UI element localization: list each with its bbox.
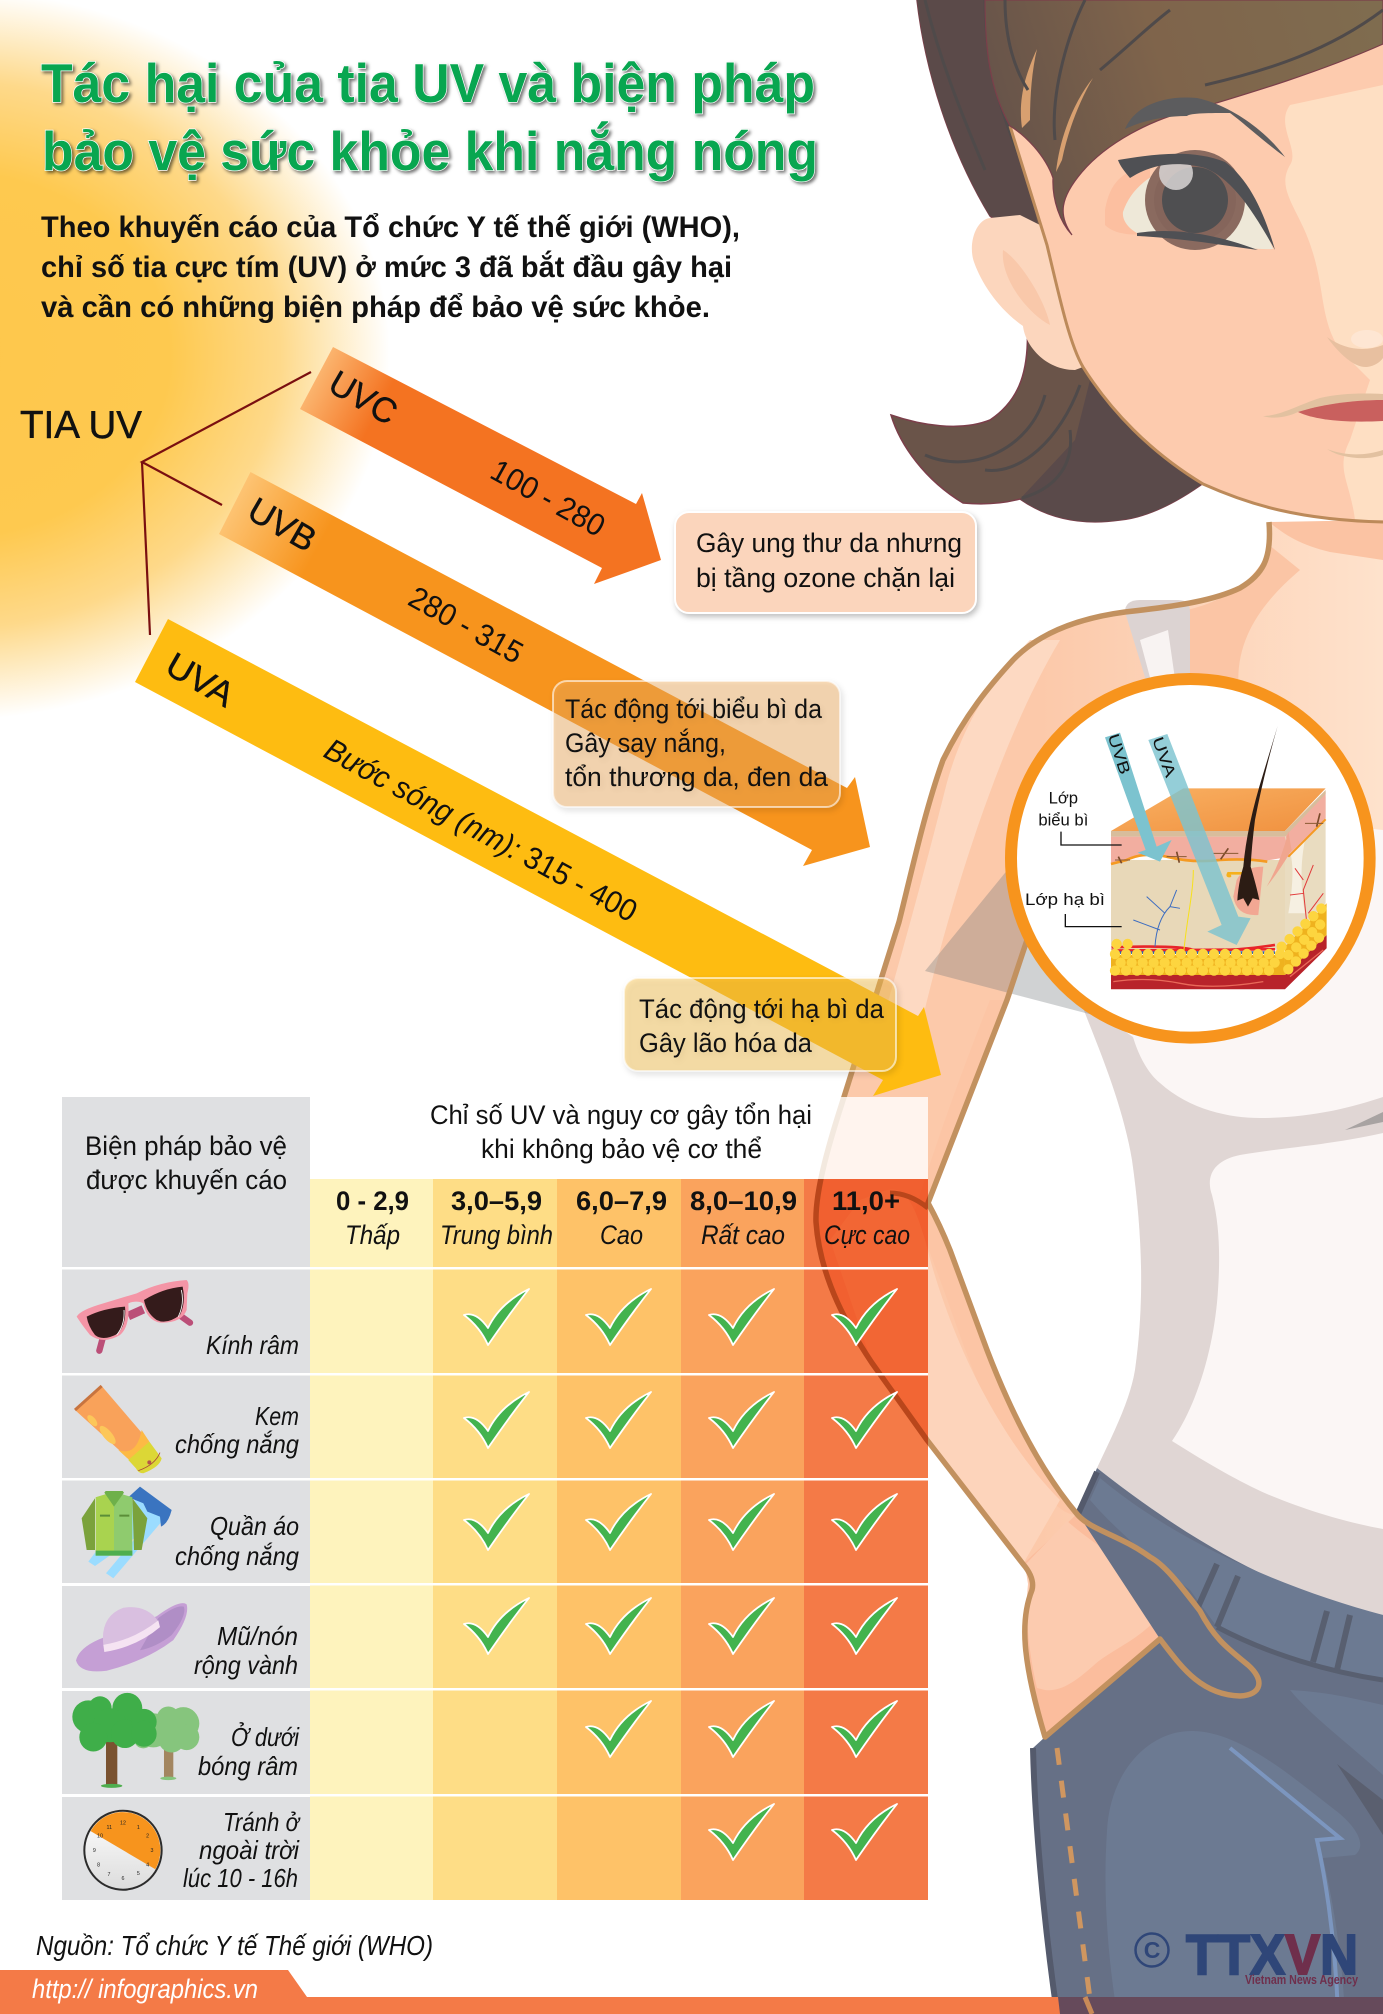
shirt xyxy=(1040,800,1383,1615)
illustration: woman xyxy=(816,0,1383,2014)
icon: clock: 8 xyxy=(97,1863,100,1869)
arrow: UVA xyxy=(135,619,941,1096)
icon: clock: 12 xyxy=(120,1821,126,1827)
icon: clock: 3 xyxy=(151,1848,153,1854)
heading: UV index xyxy=(430,1100,812,1164)
row labels: ngoài trời xyxy=(199,1835,300,1865)
heading: measures: Biện pháp bảo vệ xyxy=(85,1131,287,1161)
arrow: UVB inset: UVB xyxy=(1104,732,1133,777)
arm shading xyxy=(880,640,1060,1030)
row labels: lúc 10 - 16h xyxy=(183,1863,298,1893)
label: TIA UV: TIA UV xyxy=(20,404,142,447)
risk labels: Trung bình xyxy=(440,1220,553,1250)
shirt shadow band xyxy=(1080,1000,1383,1615)
UV index values xyxy=(336,1186,900,1216)
heading: measures xyxy=(85,1131,287,1195)
icon: clock: 9 xyxy=(93,1848,96,1854)
face xyxy=(1010,30,1383,522)
UV index values: 3,0–5,9 xyxy=(451,1186,542,1216)
skin block xyxy=(1104,726,1327,989)
footer bar xyxy=(0,1970,1383,2014)
icon: clock: 5 xyxy=(137,1871,140,1877)
ear xyxy=(972,215,1083,370)
icon: clock: 10 xyxy=(97,1834,103,1840)
callout: UVC xyxy=(675,512,976,613)
arrow: UVA inset: UVA xyxy=(1148,735,1179,780)
row labels: Kem xyxy=(255,1401,299,1431)
row separators xyxy=(62,1267,928,1796)
arrow: UVB xyxy=(219,472,870,866)
arrow: UVA: UVA xyxy=(159,645,242,715)
callout: UVB: Tác động tới biểu bì da xyxy=(565,694,823,724)
arrow: UVC: UVC xyxy=(322,363,404,433)
hair and follicle xyxy=(1233,867,1263,915)
row labels: rộng vành xyxy=(194,1650,298,1680)
icon: clock: 7 xyxy=(108,1872,110,1878)
background: sun glow xyxy=(0,0,420,760)
label: dermis: Lớp hạ bì xyxy=(1025,890,1105,909)
label: epidermis xyxy=(1038,788,1122,845)
logo: TTXVN: TTXVN xyxy=(1186,1923,1358,1987)
callout: UVB: tổn thương da, đen da xyxy=(565,762,829,792)
callout: UVA: Gây lão hóa da xyxy=(639,1028,813,1058)
risk columns xyxy=(310,1179,928,1900)
shadow wedge over arm xyxy=(925,830,1093,1015)
label: epidermis: biểu bì xyxy=(1038,811,1088,830)
callout: UVC: Gây ung thư da nhưng xyxy=(696,528,962,558)
label: dermis xyxy=(1025,890,1122,927)
UV index values: 0 - 2,9 xyxy=(336,1186,409,1216)
hand shading xyxy=(1023,1514,1259,1737)
intro text: chỉ số tia cực tím (UV) ở mức 3 đã bắt đầu gây hại xyxy=(41,250,732,284)
front hair xyxy=(985,0,1383,235)
intro text xyxy=(41,211,740,324)
arrow: UVC xyxy=(300,347,661,584)
logo: TTXVN: Vietnam News Agency xyxy=(1245,1973,1358,1987)
arrow: UVC: 100 - 280 xyxy=(485,452,611,544)
icon: clock xyxy=(84,1811,162,1890)
callout: UVB xyxy=(553,681,840,807)
icon: clock: 6 xyxy=(122,1876,124,1882)
back hair xyxy=(891,0,1205,522)
table top header band xyxy=(310,1097,928,1179)
label: epidermis: Lớp xyxy=(1049,788,1078,807)
icon: clock: 1 xyxy=(137,1825,140,1831)
gray column xyxy=(62,1097,310,1900)
icon: sun protective clothes xyxy=(82,1487,172,1578)
arrow: UVA: Bước sóng (nm): 315 - 400 xyxy=(319,731,643,929)
heading: UV index: Chỉ số UV và nguy cơ gây tổn hại xyxy=(430,1100,812,1130)
eyebrow xyxy=(1125,97,1285,157)
row labels: chống nắng xyxy=(175,1429,299,1459)
risk labels: Rất cao xyxy=(701,1220,785,1250)
intro text: Theo khuyến cáo của Tổ chức Y tế thế giới (WHO), xyxy=(41,211,740,244)
shirt strap xyxy=(1125,600,1190,700)
eye xyxy=(1105,150,1275,250)
arm outlines xyxy=(816,522,1270,1737)
icon: sun hat xyxy=(76,1603,187,1671)
row labels: chống nắng xyxy=(175,1541,299,1571)
source: Nguồn: Tổ chức Y tế Thế giới (WHO) xyxy=(36,1930,433,1961)
branching lines xyxy=(142,372,311,635)
UV index values: 11,0+ xyxy=(832,1186,900,1216)
nose xyxy=(1327,337,1383,367)
icon: clock: 2 xyxy=(146,1834,149,1840)
jeans waistband xyxy=(1090,1478,1383,1680)
jeans xyxy=(1033,1468,1383,2014)
risk labels: Thấp xyxy=(345,1220,400,1250)
title: bảo vệ sức khỏe khi nắng nóng xyxy=(42,120,818,182)
heading: UV index: khi không bảo vệ cơ thể xyxy=(481,1134,762,1164)
callout: UVA: Tác động tới hạ bì da xyxy=(639,994,885,1024)
table xyxy=(62,1097,928,1900)
risk labels xyxy=(345,1220,910,1250)
check marks xyxy=(464,1289,897,1860)
callout: UVC: bị tầng ozone chặn lại xyxy=(696,563,955,593)
title: Tác hại của tia UV và biện pháp xyxy=(41,52,815,114)
arrow: UVB: UVB xyxy=(241,490,323,560)
arrow: UVB inset xyxy=(1104,732,1172,862)
icon: clock: 4 xyxy=(146,1863,149,1869)
intro text: và cần có những biện pháp để bảo vệ sức khỏe. xyxy=(41,291,710,324)
callout: UVA xyxy=(624,978,896,1071)
icon: trees xyxy=(72,1693,199,1788)
risk labels: Cực cao xyxy=(824,1220,910,1250)
callout: UVB: Gây say nắng, xyxy=(565,727,726,758)
arm and chest skin xyxy=(816,522,1383,1737)
inset circle: skin layers xyxy=(1011,679,1370,1038)
row labels: Kính râm xyxy=(206,1330,299,1360)
logo: TTXVN: C xyxy=(1144,1937,1160,1963)
risk labels: Cao xyxy=(600,1220,643,1250)
icon: sunglasses xyxy=(77,1280,190,1351)
neck shadow xyxy=(1269,520,1383,560)
UV index values: 8,0–10,9 xyxy=(690,1186,797,1216)
title xyxy=(41,52,818,182)
row labels: Mũ/nón xyxy=(217,1621,298,1651)
icon: sunscreen tube xyxy=(75,1386,162,1473)
icon: clock: 11 xyxy=(107,1825,112,1831)
row labels: Tránh ở xyxy=(223,1807,301,1837)
row labels xyxy=(175,1330,301,1893)
row labels: bóng râm xyxy=(198,1751,298,1781)
arrow: UVB: 280 - 315 xyxy=(403,579,529,671)
arrow: UVA inset xyxy=(1148,734,1251,945)
row labels: Ở dưới xyxy=(231,1721,300,1752)
mouth xyxy=(1263,393,1383,418)
footer bar: http:// infographics.vn xyxy=(32,1974,258,2004)
heading: measures: được khuyến cáo xyxy=(86,1165,287,1195)
UV index values: 6,0–7,9 xyxy=(576,1186,667,1216)
muscle and fat xyxy=(1111,935,1327,989)
row labels: Quần áo xyxy=(210,1511,299,1541)
